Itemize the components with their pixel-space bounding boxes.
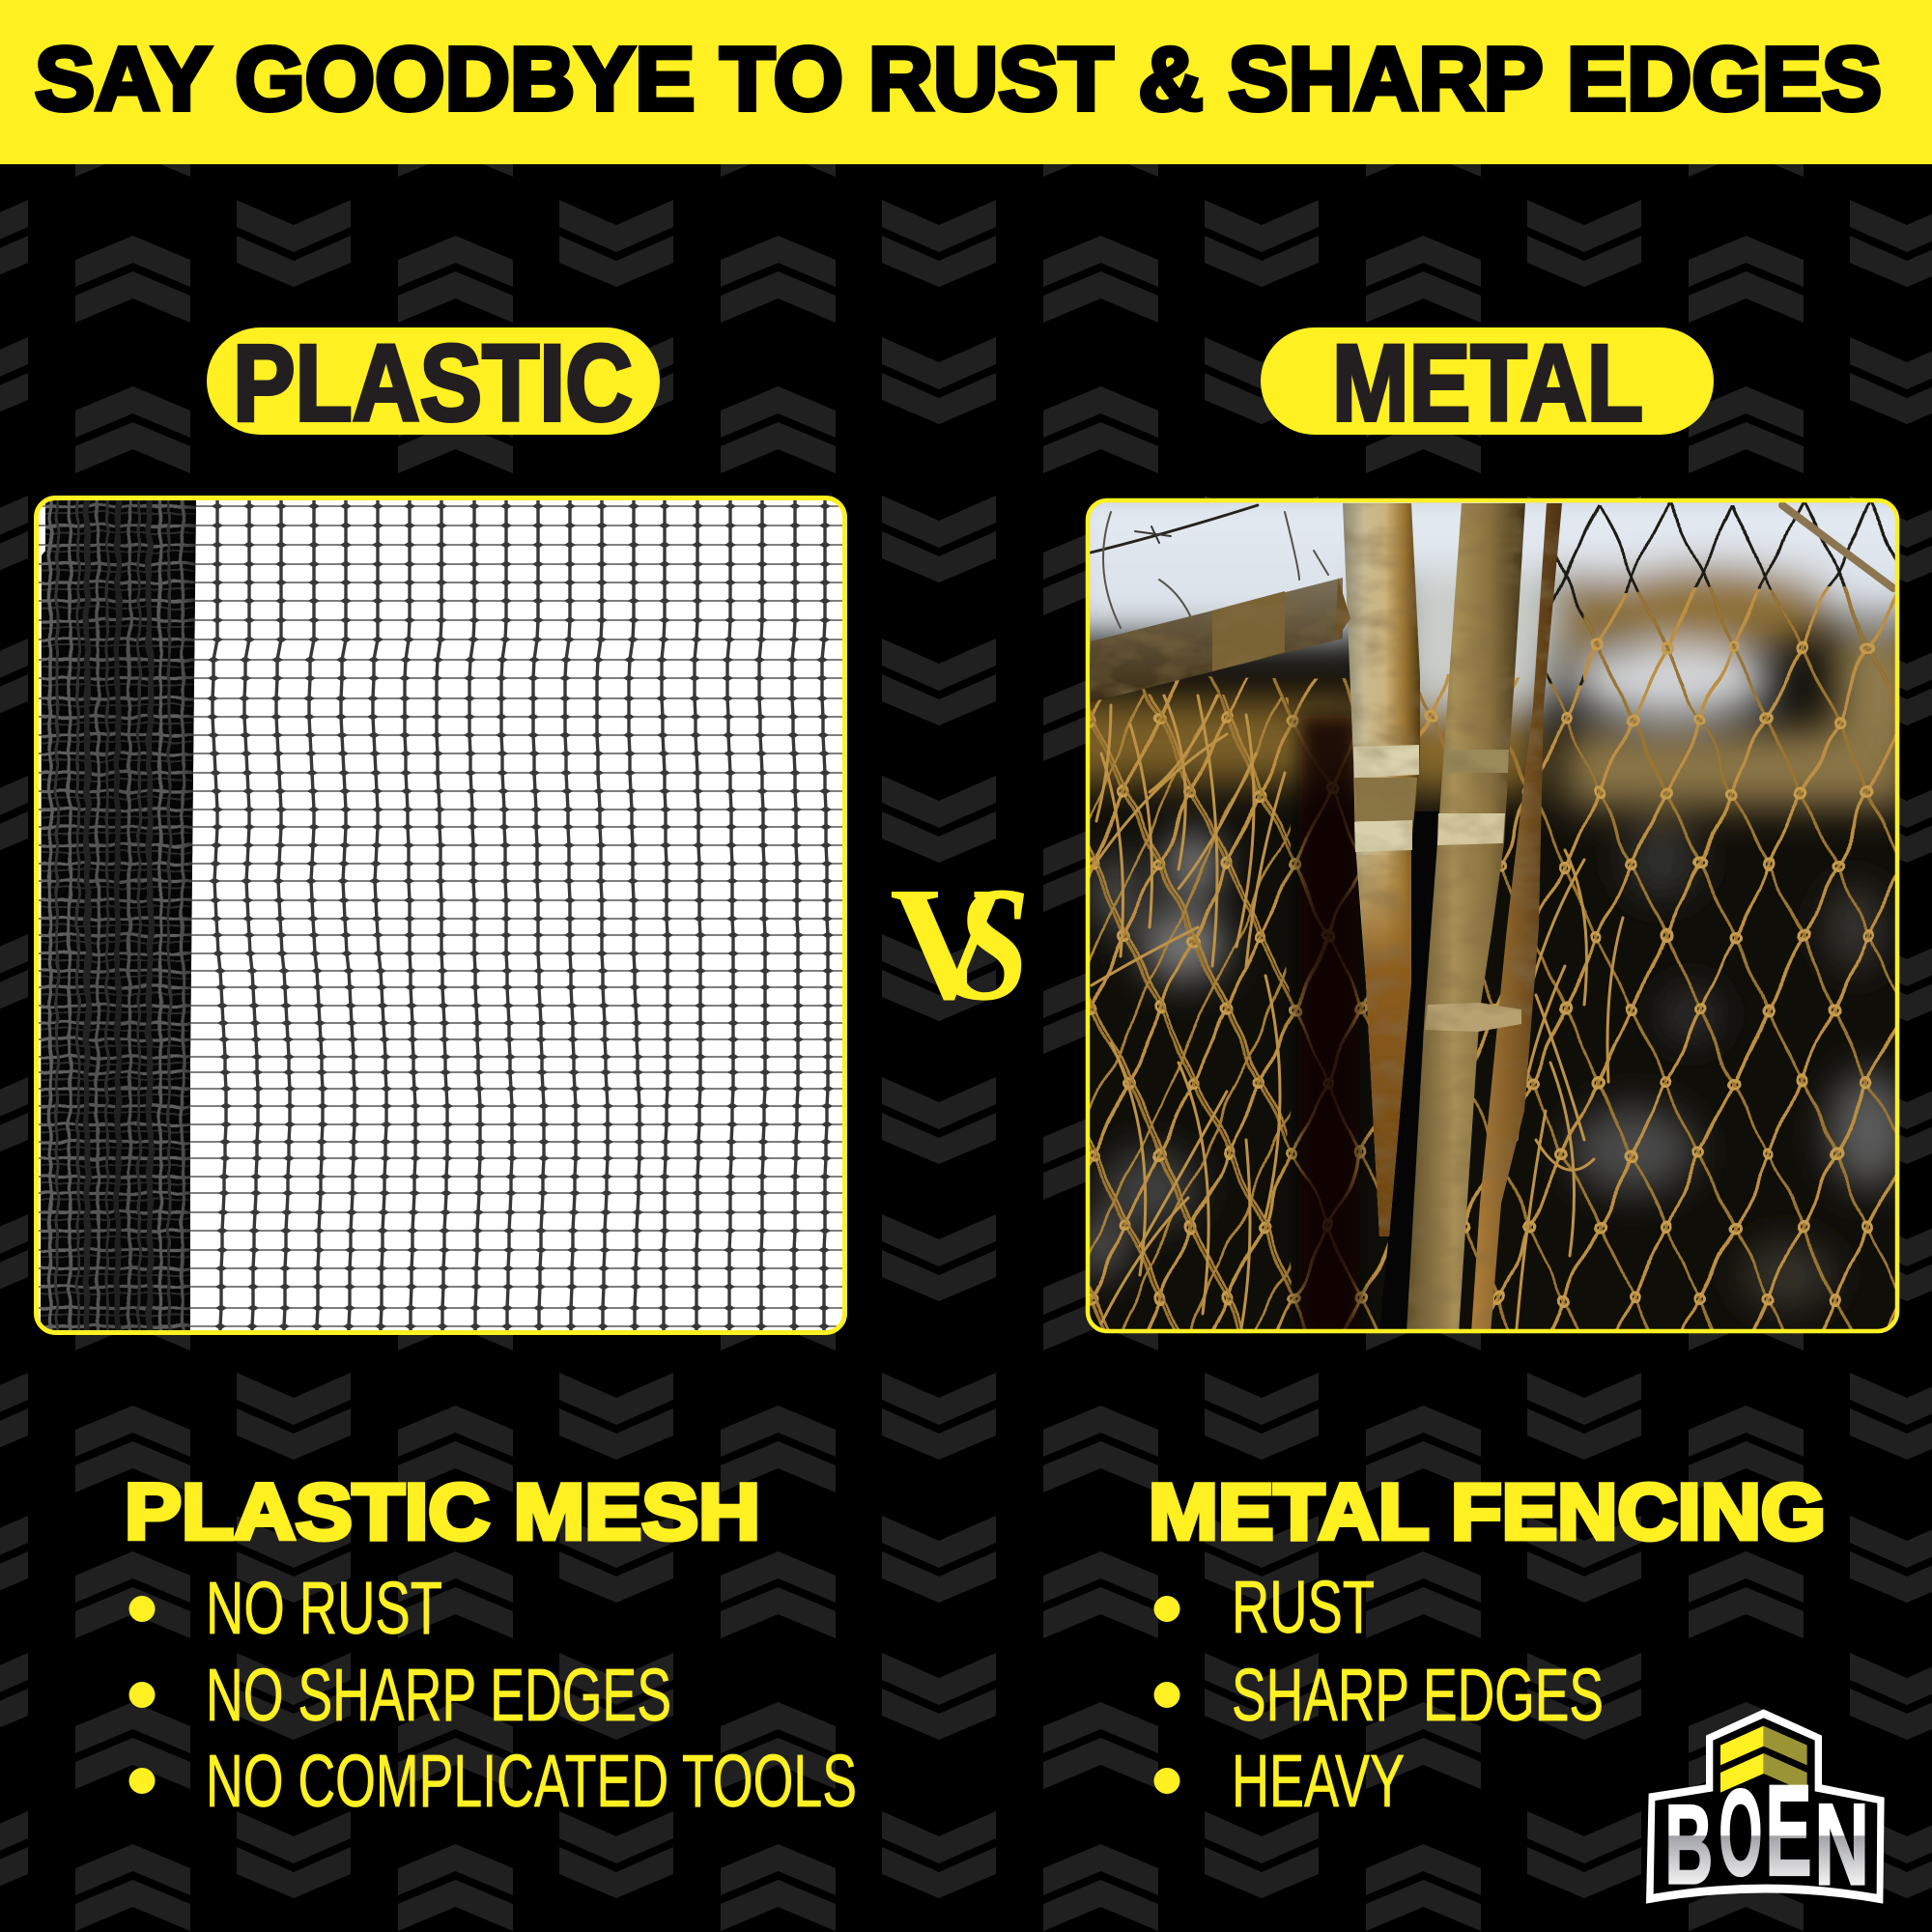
bullet list: metal drawbacks: RUST xyxy=(1232,1566,1375,1649)
logo: BOEN: O xyxy=(1719,1764,1762,1901)
bullet list: plastic benefits: NO SHARP EDGES xyxy=(206,1654,671,1737)
logo: BOEN: B xyxy=(1664,1780,1713,1907)
title banner xyxy=(0,0,1932,164)
heading: metal fencing: METAL FENCING xyxy=(1149,1468,1826,1556)
rusty posts xyxy=(1091,503,1562,1333)
logo: BOEN: E xyxy=(1765,1759,1812,1903)
rolled black mesh xyxy=(41,500,196,1330)
panel: plastic mesh photo xyxy=(34,496,847,1336)
bullet list: metal drawbacks: SHARP EDGES xyxy=(1232,1654,1604,1737)
bullet list: plastic benefits xyxy=(129,1567,857,1823)
loose wire strands xyxy=(1092,696,1623,1328)
plastic panel border xyxy=(37,498,844,1333)
vs mark: V xyxy=(890,854,1008,1034)
title: SAY GOODBYE TO RUST & SHARP EDGES xyxy=(35,29,1882,129)
vs mark: S xyxy=(954,853,1030,1035)
barbed wire and top wires xyxy=(1091,505,1893,638)
shadow gap between posts xyxy=(1379,811,1439,1333)
chain-link wire xyxy=(1072,502,1913,1343)
logo: BOEN xyxy=(1646,1709,1885,1910)
heading pill: plastic: PLASTIC xyxy=(233,323,633,443)
heading pill: metal: METAL xyxy=(1332,323,1643,443)
panel: rusty metal fence photo xyxy=(1086,498,1899,1333)
heading: plastic mesh: PLASTIC MESH xyxy=(125,1468,760,1556)
bullet list: plastic benefits: NO RUST xyxy=(206,1567,442,1650)
bullet list: plastic benefits: NO COMPLICATED TOOLS xyxy=(206,1740,857,1823)
bullet list: metal drawbacks: HEAVY xyxy=(1232,1740,1405,1823)
text block: metal fencing xyxy=(1149,1468,1826,1823)
logo: BOEN: N xyxy=(1814,1780,1869,1910)
text block: plastic mesh xyxy=(125,1468,857,1823)
bullet list: metal drawbacks xyxy=(1153,1566,1604,1823)
metal panel border xyxy=(1088,500,1897,1331)
dark shaded fence section xyxy=(1299,715,1359,1352)
